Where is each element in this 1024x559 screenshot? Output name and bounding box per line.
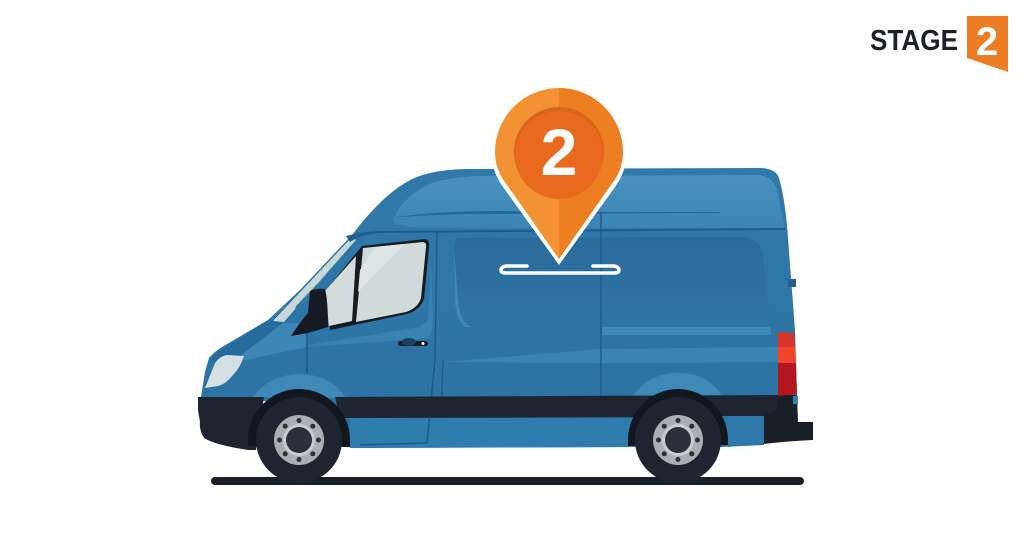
sliding door window recess bbox=[454, 237, 771, 327]
rear wheel bbox=[628, 389, 728, 483]
front door glass bbox=[325, 256, 356, 326]
windshield strip bbox=[273, 237, 356, 322]
rear bumper bbox=[763, 395, 813, 444]
windshield pillar accent bbox=[284, 237, 362, 322]
hood light surface bbox=[240, 323, 307, 360]
stage label: STAGE bbox=[870, 25, 958, 57]
door panel seams bbox=[307, 212, 601, 445]
stage badge bbox=[870, 16, 1008, 72]
hood dark band bbox=[209, 320, 283, 363]
rear lower panel bbox=[722, 416, 764, 447]
pin inner circle bbox=[515, 111, 603, 199]
rear tail light bbox=[778, 332, 797, 396]
lower cab highlight bbox=[308, 262, 433, 347]
pin left half bbox=[495, 88, 559, 259]
roof highlight panel bbox=[393, 175, 785, 228]
front wheel bbox=[248, 389, 350, 483]
pin inner ring shadow bbox=[514, 107, 604, 197]
body stripe lower bbox=[443, 347, 778, 363]
recess left highlight bbox=[454, 248, 471, 327]
van body bbox=[201, 168, 797, 448]
door handle bbox=[398, 338, 428, 346]
side marker bbox=[788, 279, 796, 287]
pin number: 2 bbox=[541, 115, 577, 189]
roof edge crease bbox=[393, 211, 720, 218]
front fender trim bbox=[253, 374, 346, 398]
window frame bbox=[326, 239, 429, 330]
rear fender trim bbox=[633, 373, 722, 398]
side mirror bbox=[291, 289, 328, 336]
glass reflections bbox=[358, 244, 405, 292]
rear marker bbox=[793, 396, 798, 404]
rear arch bbox=[628, 389, 728, 446]
stage flag bbox=[967, 16, 1008, 72]
stage number: 2 bbox=[976, 20, 998, 64]
cab roof line bbox=[346, 228, 786, 242]
lower sill highlight bbox=[350, 418, 640, 448]
black side rub strip bbox=[335, 395, 778, 418]
main door glass bbox=[356, 242, 426, 322]
front arch bbox=[248, 389, 350, 447]
location pin bbox=[491, 83, 627, 265]
body stripe upper bbox=[602, 327, 771, 335]
pin outline bbox=[491, 83, 627, 265]
ground line bbox=[211, 477, 804, 485]
front bumper bbox=[198, 397, 264, 450]
headlight bbox=[205, 355, 244, 388]
door slide rail bbox=[501, 266, 619, 273]
cab windows bbox=[325, 239, 429, 330]
pin right half bbox=[559, 88, 623, 259]
delivery van bbox=[198, 168, 813, 483]
